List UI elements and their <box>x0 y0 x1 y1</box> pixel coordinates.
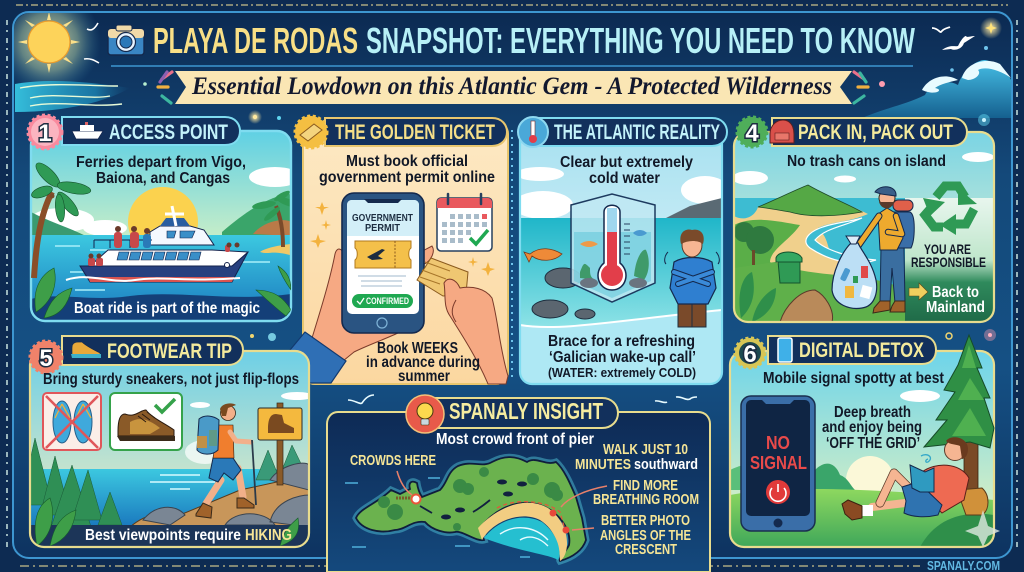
panel 6 top text: Mobile signal spotty at best <box>763 370 944 387</box>
bin <box>776 252 802 283</box>
callout: breathing room: FIND MORE <box>613 478 678 494</box>
arrow <box>909 283 928 300</box>
panel 1 top text: Ferries depart from Vigo, <box>76 154 246 171</box>
panel 3 top text <box>560 154 693 187</box>
icon: ferry <box>72 122 103 139</box>
calendar <box>437 194 492 251</box>
panel 3 bottom text: (WATER: extremely COLD) <box>548 365 696 380</box>
panel 1: access point <box>28 115 301 321</box>
badge 5: 5 <box>39 345 53 372</box>
panel 1 ferry <box>66 206 248 282</box>
panel 2 top text: Must book official <box>346 153 468 170</box>
panel 4 header: PACK IN, PACK OUT <box>798 121 953 144</box>
boot approved <box>110 393 182 450</box>
panel 4: pack in pack out <box>732 117 994 322</box>
icon: thermometer badge <box>518 117 548 147</box>
panel 5 header: FOOTWEAR TIP <box>107 340 232 363</box>
panel 1 top text: Baiona, and Cangas <box>96 170 230 187</box>
panel 5 bottom text: Best viewpoints require <box>85 527 241 544</box>
right hand with ticket <box>417 258 508 384</box>
title <box>153 20 915 61</box>
badge 6: 6 <box>743 341 757 368</box>
panel 5 top text: Bring sturdy sneakers, not just flip-flops <box>43 371 299 388</box>
phone <box>342 193 424 333</box>
panel 1 palm tree <box>30 159 92 278</box>
icon: sun and sea scene <box>14 13 123 112</box>
panel 1 header <box>28 115 240 149</box>
phone: GOVERNMENT <box>352 213 413 224</box>
left hand <box>312 246 433 361</box>
title: PLAYA DE RODAS <box>153 20 358 61</box>
callout: photo angles: BETTER PHOTO <box>601 513 690 529</box>
panel 6 header: DIGITAL DETOX <box>799 339 924 362</box>
no signal phone <box>741 396 815 531</box>
badge 1: 1 <box>38 120 52 147</box>
panel 4 responsible text: RESPONSIBLE <box>911 254 986 270</box>
subtitle banner: Essential Lowdown on this Atlantic Gem - A Protected Wilderness <box>191 73 832 100</box>
panel 6 middle text: and enjoy being <box>822 419 922 436</box>
phone: PERMIT <box>365 223 400 234</box>
callout: photo angles: ANGLES OF THE <box>600 528 691 544</box>
panel 2 bottom text: in advance during <box>366 354 480 371</box>
shivering man <box>665 230 719 327</box>
hiker <box>196 403 256 518</box>
panel 1 top text <box>76 154 246 187</box>
panel 3 header: THE ATLANTIC REALITY <box>554 121 720 144</box>
no signal phone: NO <box>766 433 790 453</box>
callout: breathing room: BREATHING ROOM <box>593 492 699 508</box>
sparkle corner <box>965 510 1000 547</box>
badge 4 <box>737 117 767 147</box>
callout: walk 10 minutes: southward <box>634 457 698 473</box>
callout: walk 10 minutes: WALK JUST 10 <box>603 442 688 458</box>
insight text: Most crowd front of pier <box>436 431 594 448</box>
callout: crowds here: CROWDS HERE <box>350 453 436 469</box>
panel 4 mainland text: Back to <box>932 284 979 301</box>
panel: spanaly insight <box>327 395 710 572</box>
panel 2: golden ticket <box>290 116 508 385</box>
reclining reader <box>842 437 988 520</box>
icon: light bulb <box>406 395 444 433</box>
callout: walk 10 minutes: MINUTES <box>575 457 631 473</box>
sparkles upper right of panel 6 <box>250 329 996 341</box>
panel 5: footwear tip <box>20 336 313 547</box>
panel 3 bottom text <box>548 333 696 380</box>
callout: photo angles: CRESCENT <box>615 542 677 558</box>
badge 1 <box>28 115 62 149</box>
icon: backpack <box>770 120 794 143</box>
cuff <box>290 332 346 383</box>
badge 4: 4 <box>745 120 759 147</box>
panel 6 header <box>735 336 936 368</box>
insight header <box>406 395 618 433</box>
sparkles between panels <box>143 82 990 380</box>
panel 2 top text: government permit online <box>319 169 495 186</box>
panel 2 top text <box>319 153 495 186</box>
callout: breathing room <box>593 478 699 508</box>
icon: ticket badge <box>295 116 327 148</box>
panel 3: the atlantic reality <box>513 117 729 384</box>
panel 5 bottom text: HIKING <box>245 527 292 544</box>
panel 4 responsible text <box>911 241 986 270</box>
panel 6 middle text: Deep breath <box>834 404 911 421</box>
panel 4 mainland text: Mainland <box>926 299 985 316</box>
tree <box>924 335 994 500</box>
hiker <box>858 187 914 313</box>
map: island <box>345 457 607 561</box>
callout: walk 10 minutes <box>575 442 698 473</box>
panel 2 header: THE GOLDEN TICKET <box>335 121 495 144</box>
panel 2 bottom text: summer <box>398 368 450 385</box>
panel 3 header <box>518 117 727 147</box>
panel 4 mainland text <box>926 284 985 316</box>
panel 3 bottom text: Brace for a refreshing <box>548 333 695 350</box>
icon: sneaker <box>71 342 101 358</box>
insight header: SPANALY INSIGHT <box>449 398 603 424</box>
recycle icon <box>923 186 977 235</box>
trash bag <box>832 236 877 308</box>
trail sign <box>258 403 302 485</box>
icon: gulls, sparkle and wave <box>862 17 1011 118</box>
ice cube with thermometer <box>571 194 655 302</box>
panel 2 header <box>295 116 507 148</box>
icon: phone <box>778 338 792 362</box>
panel 3 bottom text: ‘Galician wake-up call’ <box>549 349 696 366</box>
panel 5 header <box>30 336 243 373</box>
badge 5 <box>30 341 62 373</box>
panel 2 bottom text: Book WEEKS <box>377 340 458 357</box>
panel 1 header: ACCESS POINT <box>109 121 228 144</box>
phone: CONFIRMED <box>366 296 409 306</box>
icon: camera <box>108 25 144 55</box>
panel 4 header <box>737 117 967 147</box>
panel 6: digital detox <box>730 335 1000 547</box>
no signal phone: SIGNAL <box>750 453 807 473</box>
panel 6 middle text <box>822 404 922 452</box>
panel 3 top text: cold water <box>589 170 660 187</box>
panel 1 bottom text: Boat ride is part of the magic <box>74 300 260 317</box>
callout: photo angles <box>600 513 691 558</box>
decorative birds <box>348 395 697 403</box>
flip-flops crossed out <box>43 393 101 450</box>
panel 2 bottom text <box>366 340 480 385</box>
panel 6 middle text: ‘OFF THE GRID’ <box>826 435 920 452</box>
panel 1 foliage <box>35 266 291 318</box>
panel 4 responsible text: YOU ARE <box>924 241 971 257</box>
panel 3 top text: Clear but extremely <box>560 154 693 171</box>
panel 4 top text: No trash cans on island <box>787 153 946 170</box>
sparkles <box>310 202 495 276</box>
badge 6 <box>735 338 765 368</box>
